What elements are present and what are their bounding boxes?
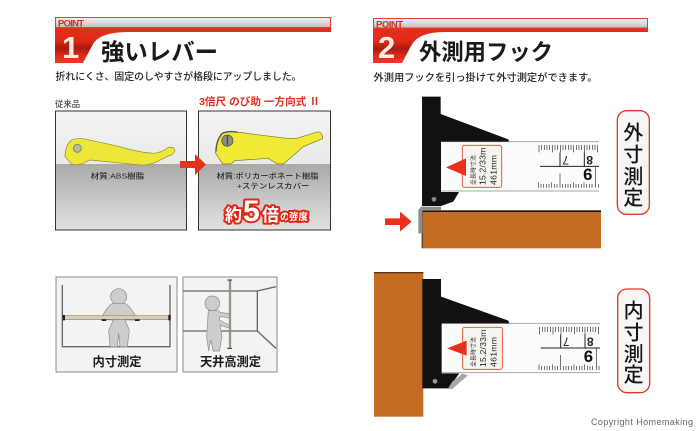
tape label card: 15.2/33m <box>478 330 488 367</box>
label pill: inside measurement: 測 <box>624 343 644 366</box>
diagram: inside measurement <box>374 272 650 417</box>
callout: 5 times stronger: 倍 <box>262 206 279 225</box>
icon: new yellow lever <box>216 131 323 164</box>
panel: conventional lever <box>56 111 186 230</box>
badge number 1: 1 <box>62 30 79 65</box>
callout: 5 times stronger: 約 <box>225 206 242 225</box>
label pill: inside measurement <box>618 289 650 393</box>
wood block <box>374 272 423 417</box>
label: product name: 3倍尺 のび助 一方向式 Ⅱ <box>199 95 320 108</box>
panel: new lever: +ステンレスカバー <box>237 182 310 190</box>
point 1 red band and badge <box>55 17 331 63</box>
callout: 5 times stronger: 5 <box>243 195 260 228</box>
label pill: outside measurement: 定 <box>623 186 643 209</box>
panel: inside measurement <box>56 277 177 372</box>
tape blade: 8 <box>586 153 593 167</box>
red triangle marker <box>447 341 467 356</box>
point 2 grey bar <box>374 18 648 28</box>
subtitle point 1: 折れにくさ、固定のしやすさが格段にアップしました。 <box>56 70 302 83</box>
copyright: Copyright Homemaking <box>591 417 693 427</box>
material text: 材質:ポリカーボネート樹脂 <box>216 172 319 180</box>
title: strong lever: 強いレバー <box>101 39 218 65</box>
tape label card: 461mm <box>489 337 499 367</box>
icon: conventional yellow lever <box>65 138 175 165</box>
label pill: outside measurement <box>617 111 649 214</box>
tape label card: 15.2/33m <box>478 148 488 185</box>
caption: 内寸測定 <box>92 354 142 369</box>
label pill: outside measurement: 外 <box>623 121 643 144</box>
room lines <box>183 287 276 348</box>
header: point 2 <box>373 18 648 65</box>
label pill: outside measurement: 測 <box>623 165 643 188</box>
point 2 red band and badge <box>373 19 648 63</box>
caption: 天井高測定 <box>200 354 261 369</box>
black hook body <box>422 279 509 388</box>
callout: 5 times stronger <box>225 195 308 228</box>
black hook body <box>422 97 509 206</box>
subtitle point 2: 外測用フックを引っ掛けて外寸測定ができます。 <box>374 71 598 84</box>
tape blade <box>442 323 600 373</box>
label pill: inside measurement: 内 <box>624 300 644 323</box>
label pill: inside measurement: 定 <box>624 363 644 386</box>
tape label card: 461mm <box>488 155 498 185</box>
icon: ruler horizontal <box>63 315 171 321</box>
tape blade: 7 <box>562 153 569 167</box>
icon: person <box>101 289 137 347</box>
icon: ruler vertical <box>226 280 233 348</box>
red triangle marker <box>446 158 466 176</box>
tape label card: 全長時寸法 <box>469 155 477 185</box>
room outline <box>62 285 170 347</box>
tape label card <box>463 327 502 369</box>
grey hook tip <box>418 207 441 233</box>
arrow: push direction <box>385 212 412 232</box>
tape blade: 7 <box>563 335 570 349</box>
POINT label: POINT <box>376 20 403 30</box>
title: outside hook: 外測用フック <box>419 40 553 65</box>
label pill: outside measurement: 寸 <box>623 143 643 166</box>
panel: ceiling height measurement <box>183 277 277 372</box>
panel: new lever <box>198 111 330 230</box>
header: point 1 <box>55 17 331 65</box>
icon: person <box>205 296 231 351</box>
grey hook tip <box>448 374 468 389</box>
label: conventional product: 従来品 <box>55 99 80 109</box>
tape blade: 8 <box>587 335 594 349</box>
wood block <box>422 211 601 248</box>
tape label card <box>462 145 502 187</box>
tape blade <box>441 142 599 191</box>
tape blade: 9 <box>584 346 593 365</box>
POINT label: POINT <box>58 18 84 30</box>
tape blade: 9 <box>583 165 592 184</box>
point 1 grey bar <box>56 18 330 28</box>
material text: 材質:ABS樹脂 <box>91 172 145 180</box>
tape label card: 全長時寸法 <box>470 337 478 367</box>
badge number 2: 2 <box>378 30 395 65</box>
arrow: red comparison arrow <box>180 154 206 175</box>
label pill: inside measurement: 寸 <box>624 322 644 345</box>
callout: 5 times stronger: の強度 <box>280 211 308 223</box>
diagram: outside measurement <box>385 97 649 248</box>
